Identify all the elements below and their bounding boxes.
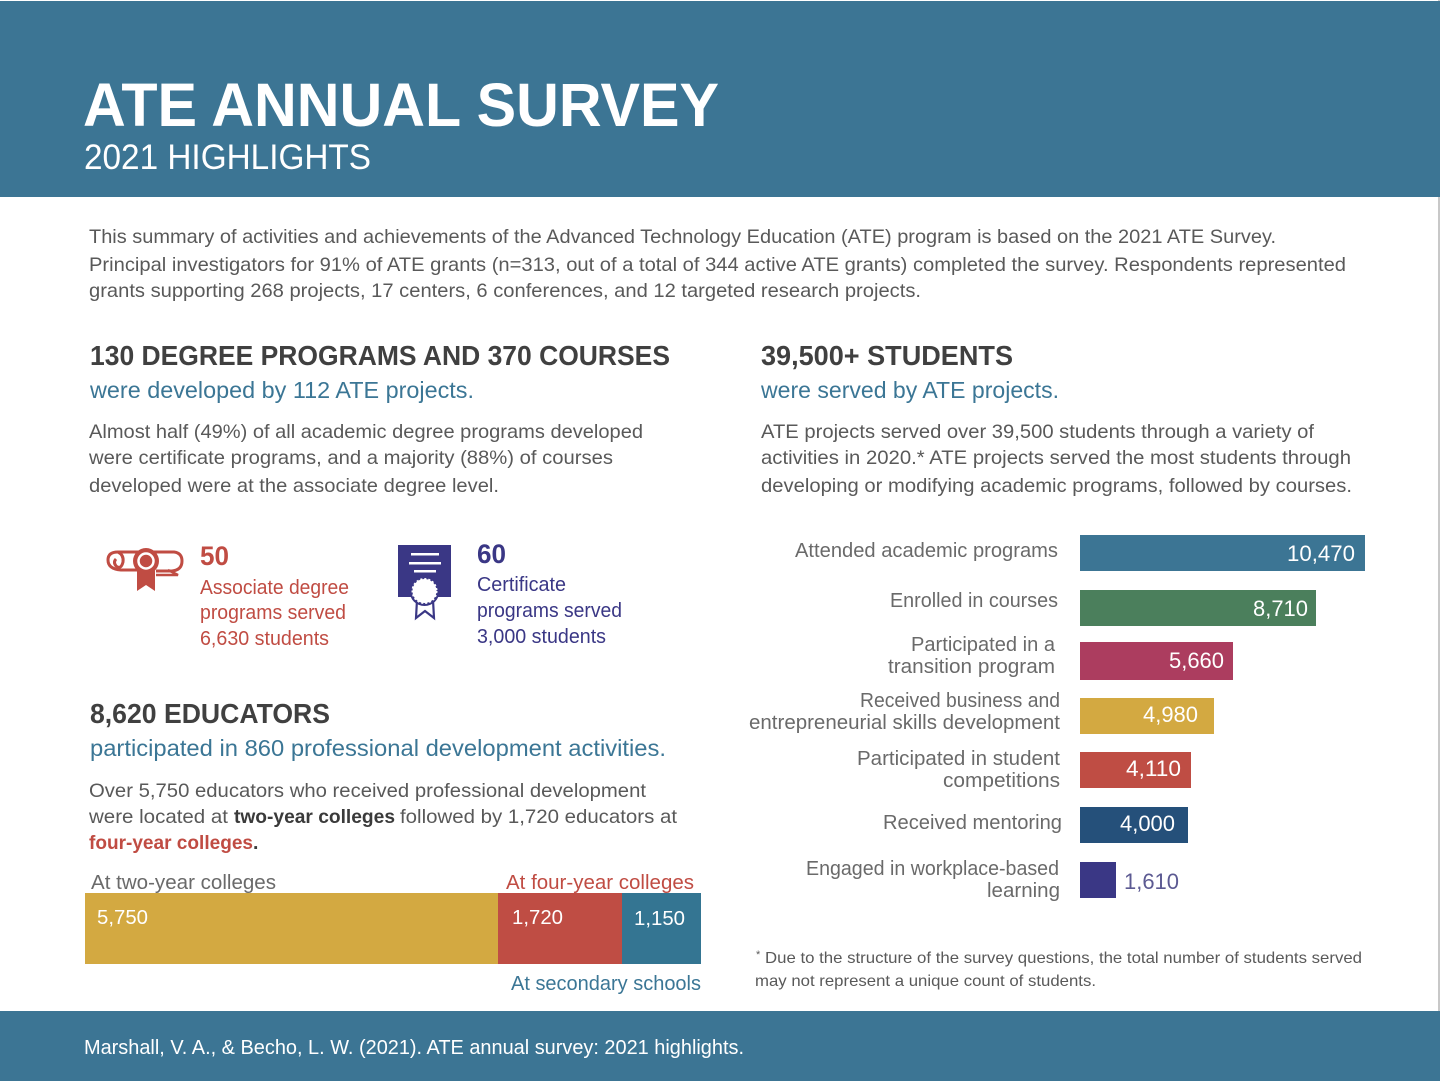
stat: associate degree (200, 541, 349, 650)
heading: educators: 8,620 EDUCATORS (90, 698, 330, 729)
paragraph: educators: Over 5,750 educators who received professional development (89, 780, 647, 802)
heading: students: 39,500+ STUDENTS (761, 340, 1013, 371)
bar: business and entrepreneurial skills (749, 690, 1214, 734)
icon: certificate (398, 545, 451, 618)
paragraph: educators: followed by 1,720 educators at (400, 806, 678, 828)
footnote: Due to the structure of the survey questions, the total number of students served (765, 950, 1362, 967)
segment: two-year (85, 893, 498, 964)
citation: Marshall, V. A., & Becho, L. W. (2021). ATE annual survey: 2021 highlights. (84, 1037, 744, 1059)
bar: student competitions (857, 748, 1191, 792)
stat: associate degree: Associate degree (200, 577, 349, 599)
bar: student competitions: 4,110 (1126, 756, 1181, 781)
panel: degree programs (88, 340, 670, 497)
paragraph: degree programs: developed were at the associate degree level. (89, 475, 499, 497)
intro text block (89, 226, 1346, 302)
header banner (0, 1, 1440, 197)
segment: secondary: 1,150 (634, 908, 685, 930)
footer banner (0, 1011, 1440, 1081)
bar: workplace-based learning: Engaged in workplace-based (806, 858, 1059, 880)
segment: two-year: 5,750 (97, 907, 148, 929)
segment: secondary (622, 893, 701, 964)
footnote (755, 949, 1362, 990)
subtitle: 2021 HIGHLIGHTS (84, 138, 371, 177)
stat: certificate: 3,000 students (477, 626, 606, 648)
subheading: degree programs: were developed by 112 ATE projects. (89, 377, 474, 403)
stat: associate degree: 6,630 students (200, 628, 329, 650)
bar: transition program: transition program (888, 656, 1055, 678)
bar: business and entrepreneurial skills: entrepreneurial skills development (749, 712, 1060, 734)
paragraph: degree programs: were certificate programs, and a majority (88%) of courses (88, 447, 613, 469)
bar: transition program: Participated in a (911, 634, 1056, 656)
stat: certificate (477, 539, 622, 648)
subheading: students: were served by ATE projects. (760, 377, 1059, 403)
label: four-year colleges: At four-year colleges (506, 872, 694, 894)
footnote: may not represent a unique count of students. (755, 973, 1096, 990)
icon: diploma scroll (108, 548, 182, 591)
paragraph: students (761, 421, 1352, 497)
paragraph: students: developing or modifying academic programs, followed by courses. (761, 475, 1352, 497)
panel: students (760, 340, 1352, 497)
panel: educators (88, 698, 678, 854)
bar: enrolled in courses: Enrolled in courses (890, 590, 1058, 612)
label: secondary schools: At secondary schools (511, 973, 701, 995)
paragraph: educators: . (253, 832, 258, 854)
paragraph: educators: four-year colleges (89, 832, 253, 854)
bar: student competitions: competitions (943, 770, 1060, 792)
intro text block: grants supporting 268 projects, 17 centers, 6 conferences, and 12 targeted research projects. (89, 280, 921, 302)
paragraph: degree programs: Almost half (49%) of all academic degree programs developed (89, 421, 643, 443)
bar: enrolled in courses (890, 590, 1316, 626)
segment: four-year: 1,720 (512, 907, 563, 929)
paragraph: educators: two-year colleges (234, 806, 395, 828)
segment: four-year (498, 893, 622, 964)
stacked bar chart: educators by institution (85, 872, 701, 995)
bar: student competitions: Participated in student (857, 748, 1060, 770)
stat: associate degree: 50 (200, 541, 229, 571)
bar: workplace-based learning: 1,610 (1124, 869, 1179, 894)
stat: associate degree: programs served (200, 602, 346, 624)
intro text block: This summary of activities and achievements of the Advanced Technology Education (ATE) program is based on the 2021 ATE Survey. (89, 226, 1276, 248)
stat: certificate: Certificate (477, 574, 566, 596)
label: two-year colleges: At two-year colleges (91, 872, 276, 894)
paragraph: educators (88, 780, 678, 854)
bar: received mentoring: Received mentoring (883, 812, 1062, 834)
bar: transition program (888, 634, 1233, 680)
intro text block: Principal investigators for 91% of ATE grants (n=313, out of a total of 344 active ATE grants) completed the survey. Respondents represented (89, 254, 1346, 276)
bar: attended academic programs: 10,470 (1287, 541, 1355, 566)
stat: certificate: programs served (477, 600, 622, 622)
subheading: educators: participated in 860 professional development activities. (90, 735, 666, 761)
paragraph: degree programs (88, 421, 643, 497)
bar: received mentoring (883, 807, 1188, 843)
bar chart: students served by activity (749, 535, 1365, 902)
bar: enrolled in courses: 8,710 (1253, 596, 1308, 621)
title: ATE ANNUAL SURVEY (83, 71, 719, 139)
bar: workplace-based learning (806, 858, 1179, 902)
bar: business and entrepreneurial skills: 4,980 (1143, 702, 1198, 727)
paragraph: students: ATE projects served over 39,500 students through a variety of (761, 421, 1315, 443)
bar: attended academic programs (795, 535, 1365, 571)
bar: attended academic programs: Attended academic programs (795, 540, 1058, 562)
footnote: * (756, 949, 761, 961)
bar: received mentoring: 4,000 (1120, 811, 1175, 836)
stat: certificate: 60 (477, 539, 506, 569)
heading: degree programs: 130 DEGREE PROGRAMS AND 370 COURSES (90, 340, 670, 371)
bar: workplace-based learning: learning (987, 880, 1060, 902)
bar: business and entrepreneurial skills: Received business and (860, 690, 1060, 712)
paragraph: educators: were located at (88, 806, 229, 828)
bar: transition program: 5,660 (1169, 648, 1224, 673)
paragraph: students: activities in 2020.* ATE projects served the most students through (761, 447, 1351, 469)
